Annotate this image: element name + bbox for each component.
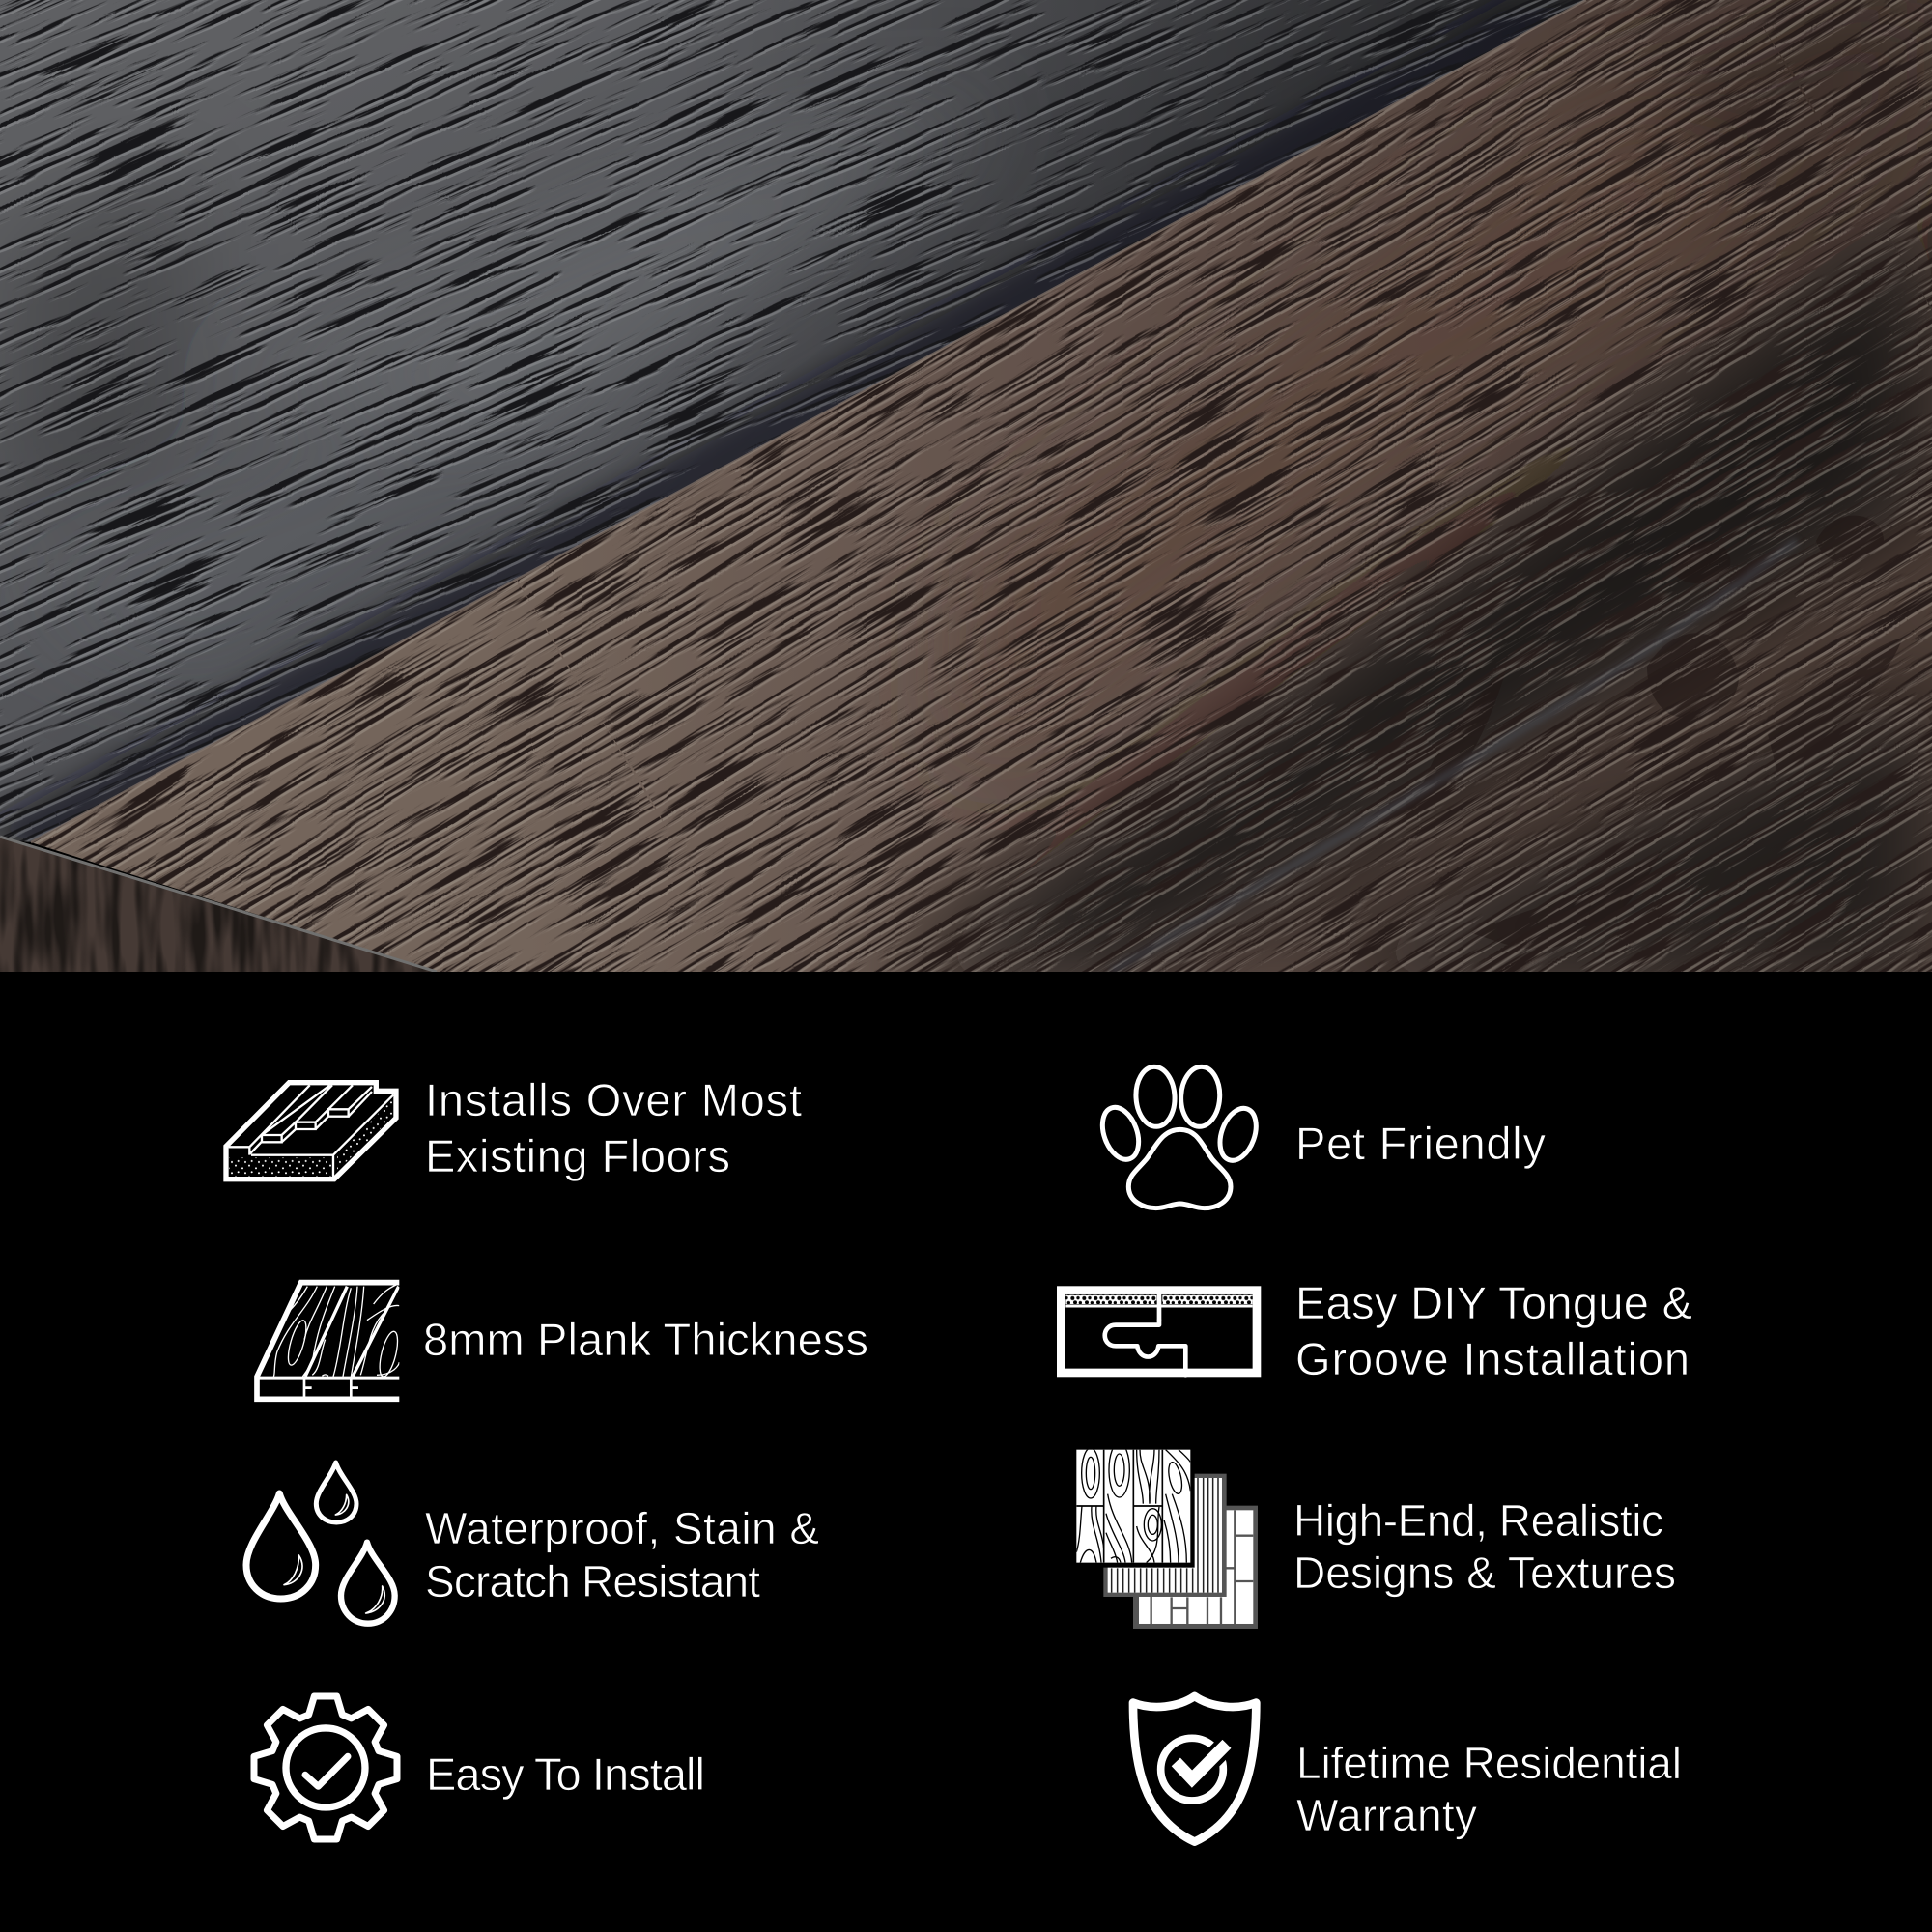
text: Lifetime Residential <box>1296 1738 1682 1788</box>
feature: easy DIY tongue and groove installation <box>1061 1277 1692 1384</box>
feature: easy to install <box>254 1696 705 1839</box>
brown plank <box>0 0 1932 985</box>
plank end edge <box>0 838 431 972</box>
icon: shield with check mark <box>1133 1696 1256 1842</box>
icon: layered floor section <box>226 1083 396 1179</box>
text: 8mm Plank Thickness <box>423 1314 868 1365</box>
icon: wood plank with grain <box>257 1283 406 1399</box>
text: High-End, Realistic <box>1293 1495 1663 1546</box>
feature: lifetime residential warranty: Warranty <box>1296 1790 1477 1840</box>
icon: water drops <box>246 1463 395 1624</box>
feature: easy DIY tongue and groove installation: Groove Installation <box>1295 1333 1690 1384</box>
text: Installs Over Most <box>425 1074 802 1125</box>
feature: installs over most existing floors <box>226 1074 802 1181</box>
icon: stacked texture samples <box>1072 1442 1258 1629</box>
feature: waterproof, stain and scratch resistant: Scratch Resistant <box>425 1556 760 1606</box>
photo: wood plank flooring close-up <box>0 0 1932 985</box>
feature: high-end realistic designs and textures <box>1072 1442 1676 1629</box>
text: Waterproof, Stain & <box>425 1503 819 1553</box>
back sample: tile <box>1133 1506 1258 1629</box>
middle sample: fine grain <box>1103 1474 1227 1597</box>
front sample: wood grain <box>1076 1442 1190 1563</box>
feature: installs over most existing floors: Existing Floors <box>425 1130 730 1181</box>
feature: 8mm plank thickness <box>257 1283 868 1399</box>
feature: waterproof, stain and scratch resistant <box>246 1463 819 1624</box>
feature: high-end realistic designs and textures: Designs & Textures <box>1293 1548 1676 1598</box>
icon: tongue and groove cross-section <box>1061 1287 1257 1375</box>
text: Pet Friendly <box>1295 1118 1546 1169</box>
text: Easy DIY Tongue & <box>1295 1277 1692 1328</box>
knots and cathedral grain <box>1420 516 1903 949</box>
icon: gear with check mark <box>254 1696 397 1839</box>
icon: paw print <box>1095 1065 1263 1208</box>
feature: pet friendly <box>1095 1065 1546 1208</box>
dark grey plank <box>0 0 1586 842</box>
plank seam highlight <box>0 0 1586 972</box>
text: Easy To Install <box>426 1748 705 1800</box>
feature: lifetime residential warranty <box>1133 1696 1682 1842</box>
